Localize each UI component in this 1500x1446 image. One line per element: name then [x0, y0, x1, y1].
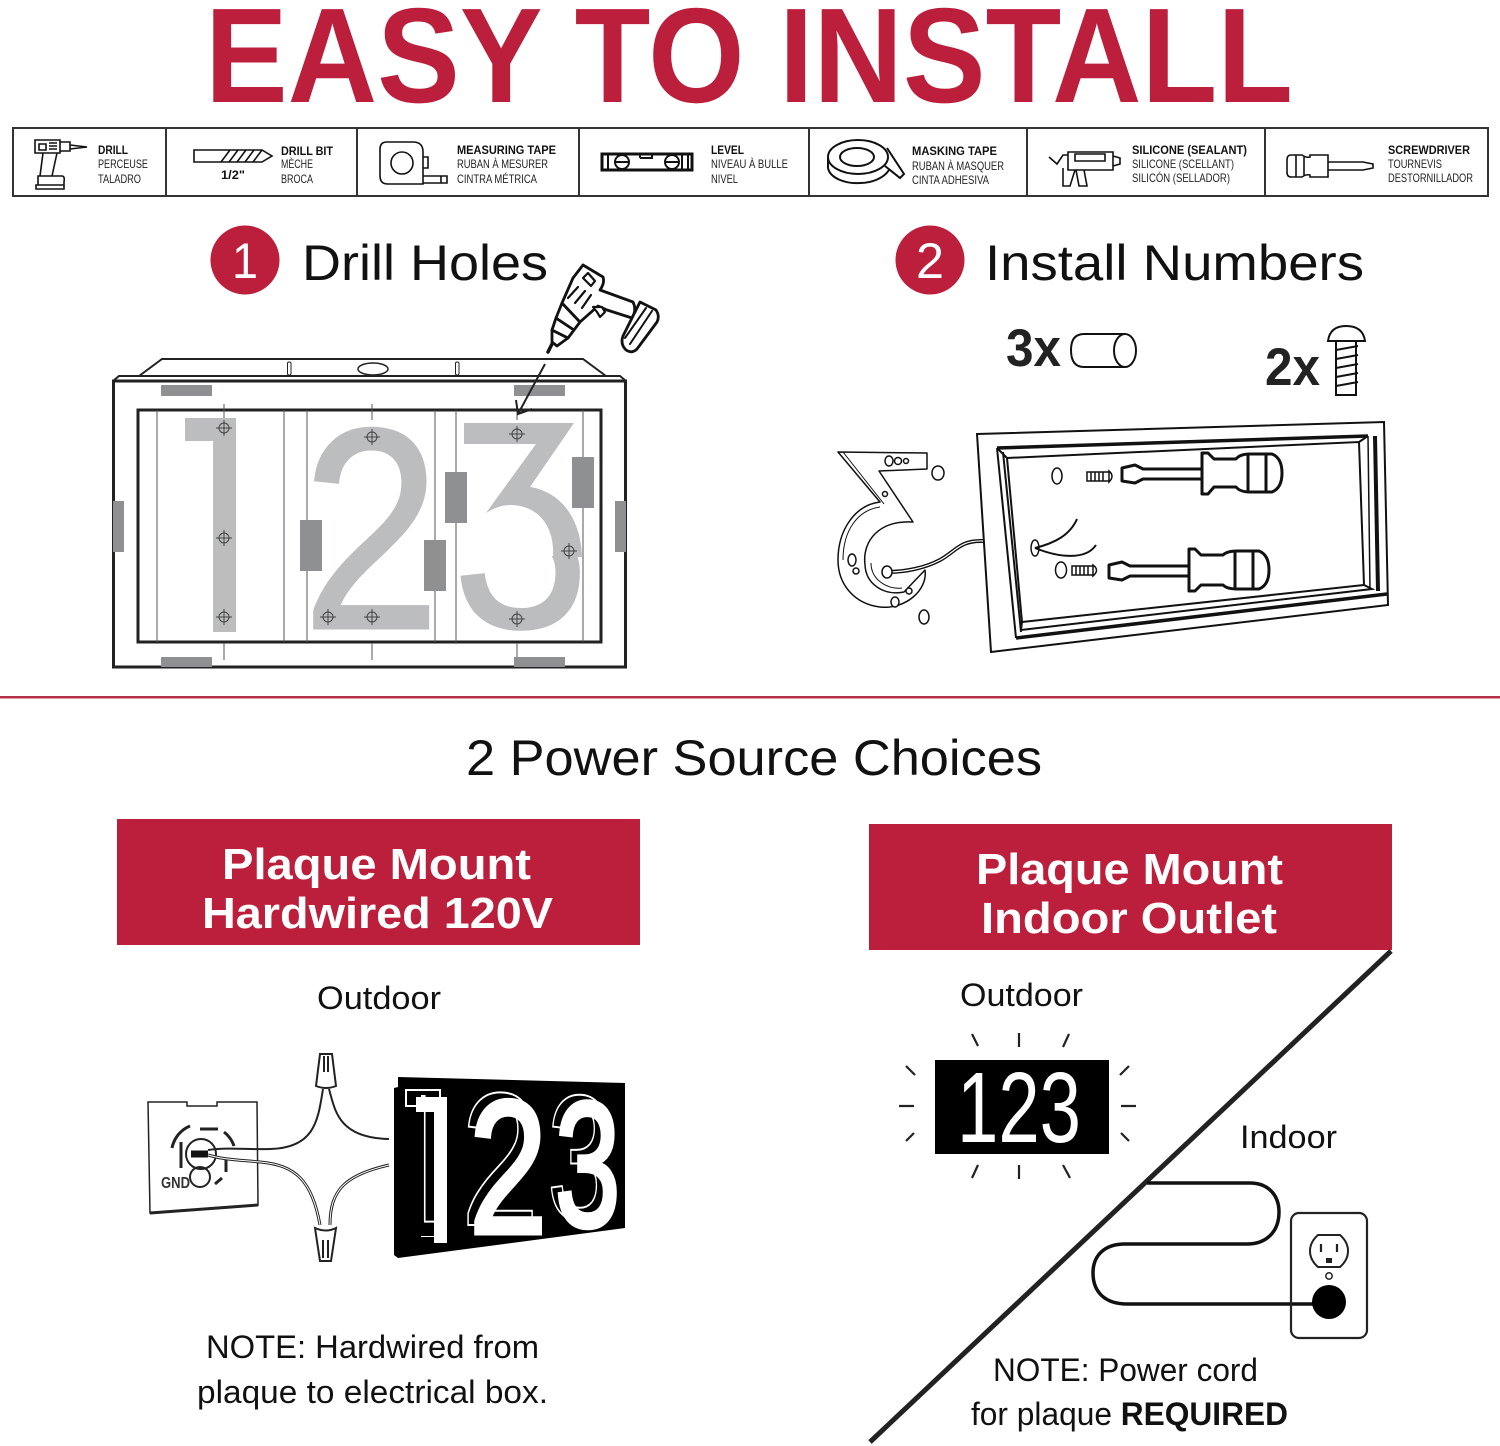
note: power cord: for plaque REQUIRED [971, 1396, 1288, 1432]
tool: drill bit: BROCA [281, 172, 313, 186]
glowing sign [899, 1033, 1136, 1179]
label: Indoor: Indoor [1240, 1119, 1337, 1155]
hardware count: 2x screws [1265, 326, 1365, 397]
heading: step 1 Drill Holes: 1 [232, 233, 258, 289]
tool: measuring tape: CINTRA MÉTRICA [457, 171, 537, 186]
gray template digits 123: 2 [302, 369, 440, 689]
tool: drill bit: 1/2" [221, 168, 245, 182]
wall line [870, 951, 1391, 1442]
icon: drill [548, 265, 658, 352]
tool: masking tape: CINTA ADHESIVA [912, 173, 989, 187]
electrical box [148, 1102, 258, 1213]
note: hardwired [197, 1329, 548, 1410]
tool: silicone gun [1049, 143, 1247, 186]
digit outlines behind: 1 [369, 1053, 460, 1281]
banner: Plaque Mount Indoor Outlet: Plaque Mount [976, 845, 1283, 894]
plaque frame [113, 359, 626, 667]
banner: Plaque Mount Indoor Outlet: Indoor Outlet [981, 894, 1277, 943]
heading: step 2 Install Numbers: 2 [916, 233, 944, 289]
diagram: drilling template [113, 265, 658, 697]
label: Outdoor: Outdoor [317, 980, 441, 1016]
tool: silicone gun: SILICÓN (SELLADOR) [1132, 170, 1230, 185]
tool: screwdriver [1287, 143, 1473, 185]
wall outlet [1291, 1213, 1367, 1338]
note: hardwired: NOTE: Hardwired from [206, 1329, 539, 1365]
lit digits 123: 1 [380, 1059, 471, 1287]
hardware count: 3x spacers: 3x [1006, 319, 1061, 378]
tool: measuring tape: MEASURING TAPE [457, 143, 556, 157]
holes, screws and wires [1031, 468, 1112, 578]
screwdriver bottom [1109, 549, 1269, 591]
note: hardwired: plaque to electrical box. [197, 1374, 548, 1410]
panel: tools bar [13, 128, 1488, 196]
banner: Plaque Mount Hardwired 120V [117, 819, 640, 945]
tool: masking tape [828, 140, 1004, 187]
tool: level [602, 143, 788, 186]
tool: silicone gun: SILICONE (SEALANT) [1132, 143, 1247, 157]
drill hole crosshairs [216, 420, 577, 627]
lit digits 123: 3 [555, 1064, 620, 1264]
tool: screwdriver: DESTORNILLADOR [1388, 171, 1473, 185]
gray template digits 123: 1 [147, 356, 291, 697]
mounting tabs [113, 385, 626, 667]
plaque back frame [977, 422, 1388, 652]
heading: step 2 Install Numbers: Install Numbers [985, 235, 1364, 291]
heading: 2 Power Source Choices: 2 Power Source Choices [466, 730, 1042, 786]
tool: measuring tape: RUBAN À MESURER [457, 156, 548, 171]
label: Outdoor: Outdoor [960, 977, 1083, 1013]
note: power cord: NOTE: Power cord [993, 1352, 1258, 1388]
tool: masking tape: MASKING TAPE [912, 144, 997, 158]
tool: screwdriver: SCREWDRIVER [1388, 143, 1470, 157]
tool: drill: DRILL [98, 143, 128, 157]
tool: drill: TALADRO [98, 172, 141, 186]
tool: silicone gun: SILICONE (SCELLANT) [1132, 157, 1234, 171]
lit digits 123 [416, 1097, 617, 1243]
wire nuts and wires [208, 1054, 389, 1261]
tool: masking tape: RUBAN À MASQUER [912, 158, 1004, 173]
note: power cord [971, 1352, 1288, 1432]
tool: drill bit: DRILL BIT [281, 144, 334, 158]
tool: level: NIVEL [711, 172, 738, 186]
numeral 3 back with spacers and cable [838, 452, 983, 624]
tool: drill bit: MÈCHE [281, 156, 313, 171]
heading: step 2 Install Numbers [896, 226, 1364, 294]
screwdriver top [1122, 453, 1282, 494]
glowing sign: 123 [957, 1052, 1081, 1164]
hardware count: 2x screws: 2x [1265, 338, 1320, 397]
banner: Plaque Mount Hardwired 120V: Hardwired 120V [202, 889, 554, 938]
heading: step 1 Drill Holes [210, 226, 548, 294]
tool: level: NIVEAU À BULLE [711, 156, 788, 171]
heading: step 1 Drill Holes: Drill Holes [302, 235, 548, 291]
lit digits 123: 2 [469, 1062, 547, 1274]
divider [0, 696, 1500, 698]
electrical box: GND [161, 1175, 190, 1192]
panel: hardwired option [117, 819, 640, 1410]
lit sign [394, 1077, 625, 1258]
diagram: install numbers [838, 422, 1388, 652]
tool: screwdriver: TOURNEVIS [1388, 157, 1442, 171]
hardware count: 3x spacers [1006, 319, 1136, 378]
banner: Plaque Mount Indoor Outlet [869, 824, 1392, 950]
digit outlines behind: 2 [461, 1054, 539, 1266]
gray template digits 123: 3 [452, 369, 590, 688]
tool: level: LEVEL [711, 143, 744, 157]
digit outlines behind: 3 [547, 1057, 612, 1257]
tool: measuring tape [380, 142, 556, 186]
arrow [516, 364, 545, 414]
gray template digits 123 [185, 418, 582, 632]
panel: indoor outlet option [869, 824, 1392, 1442]
digit outlines behind [405, 1089, 598, 1237]
banner: Plaque Mount Hardwired 120V: Plaque Mount [222, 840, 531, 889]
tool: drill: PERCEUSE [98, 157, 148, 171]
tool: drill [35, 140, 148, 189]
power cord [1093, 1183, 1313, 1304]
tool: drill bit [194, 144, 334, 186]
